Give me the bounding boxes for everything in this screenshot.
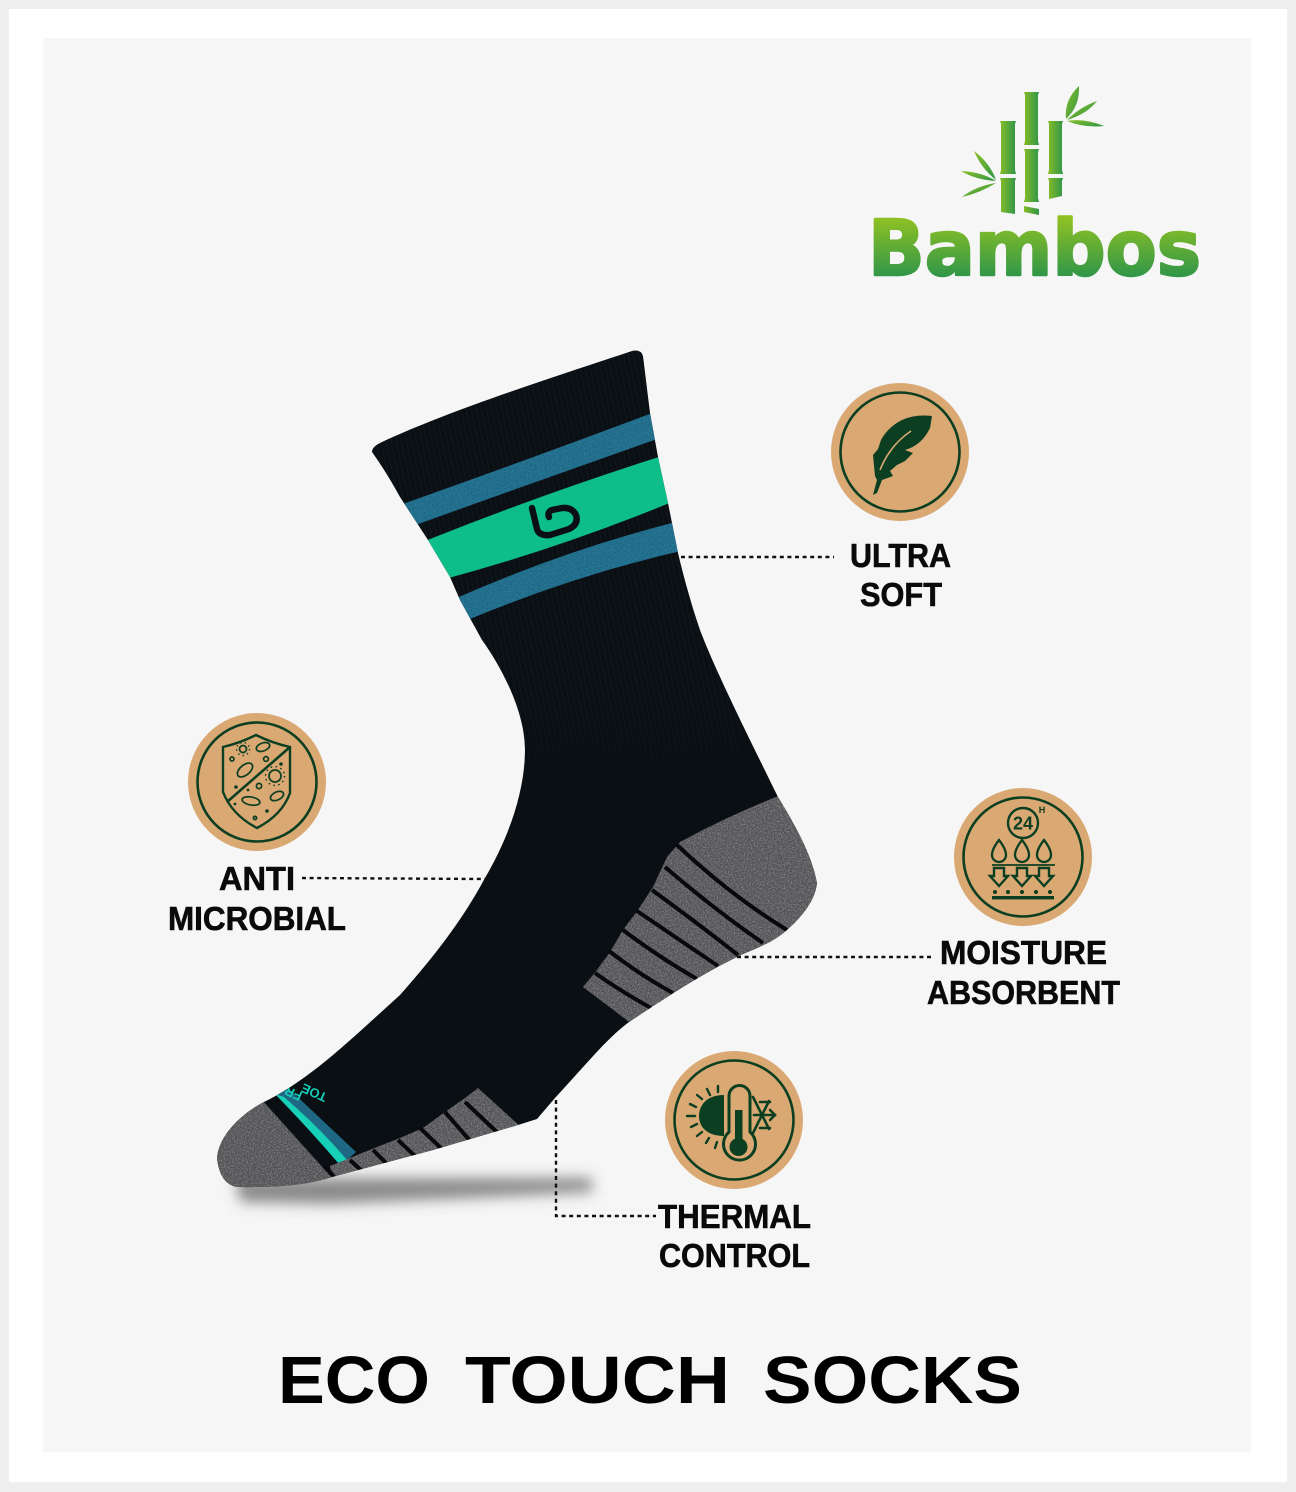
icon: feather (ultra soft) <box>831 383 969 521</box>
cuff logo mark <box>532 508 577 535</box>
leader line: ultra soft <box>681 556 834 558</box>
brand logo: Bambos <box>868 86 1201 294</box>
lower blue stripe <box>452 522 685 621</box>
upper blue stripe <box>400 412 660 527</box>
grey sole panel <box>325 1088 522 1178</box>
title: ECO <box>278 1343 430 1418</box>
icon: shield with microbes (anti microbial) <box>188 713 326 851</box>
shield outline <box>223 735 290 828</box>
toe tiny text: FR <box>282 1083 304 1104</box>
title: SOCKS <box>763 1343 1022 1418</box>
sole dark ribs <box>325 1102 500 1178</box>
label: ultra soft <box>850 537 951 613</box>
leader line: anti microbial <box>302 878 485 879</box>
water drops <box>992 840 1051 862</box>
icon: bamboo stalks <box>1000 92 1063 215</box>
icon: thermometer sun snowflake (thermal control) <box>665 1051 803 1189</box>
label: moisture absorbent: ABSORBENT <box>927 974 1120 1011</box>
label: thermal control: THERMAL <box>658 1198 811 1235</box>
thermometer <box>724 1086 756 1160</box>
microbes <box>230 741 285 820</box>
label: anti microbial: MICROBIAL <box>168 900 346 937</box>
down arrows <box>990 868 1053 886</box>
label: anti microbial: ANTI <box>219 860 295 897</box>
title: TOUCH <box>465 1343 730 1418</box>
logo wordmark: Bambos <box>868 205 1201 294</box>
grey toe cap <box>217 1102 332 1188</box>
snowflake <box>753 1097 775 1133</box>
shadow under sock <box>236 1178 592 1204</box>
label: anti microbial <box>168 860 346 937</box>
cuff stripes <box>400 412 685 621</box>
sock illustration <box>200 340 840 1200</box>
heel dark ribs <box>595 845 787 1008</box>
toe stripe <box>275 1086 356 1164</box>
label: moisture absorbent: MOISTURE <box>940 934 1107 971</box>
sock body <box>200 340 840 1200</box>
label: thermal control: CONTROL <box>659 1237 810 1274</box>
icon: moisture drops 24h (moisture absorbent): H <box>1039 805 1045 815</box>
leader line: moisture absorbent <box>737 956 934 958</box>
grey heel panel <box>583 796 817 1022</box>
icon: moisture drops 24h (moisture absorbent) <box>954 788 1092 926</box>
central green stripe <box>425 456 672 579</box>
half sun <box>699 1095 724 1136</box>
label: ultra soft: ULTRA <box>850 537 951 574</box>
rib texture on leg <box>360 340 740 801</box>
sun rays <box>687 1086 718 1148</box>
label: thermal control <box>658 1198 811 1274</box>
diagonal slash <box>227 747 290 802</box>
toe tiny text <box>285 1083 326 1102</box>
leader line: thermal control <box>556 1100 656 1216</box>
icon: moisture drops 24h (moisture absorbent): 24 <box>1013 814 1033 834</box>
icon: bamboo leaves <box>961 86 1104 197</box>
toe tiny text: TOE <box>299 1080 329 1105</box>
label: ultra soft: SOFT <box>860 576 942 613</box>
label: moisture absorbent <box>927 934 1120 1011</box>
24 hour badge <box>1008 808 1038 838</box>
title <box>278 1343 1022 1418</box>
